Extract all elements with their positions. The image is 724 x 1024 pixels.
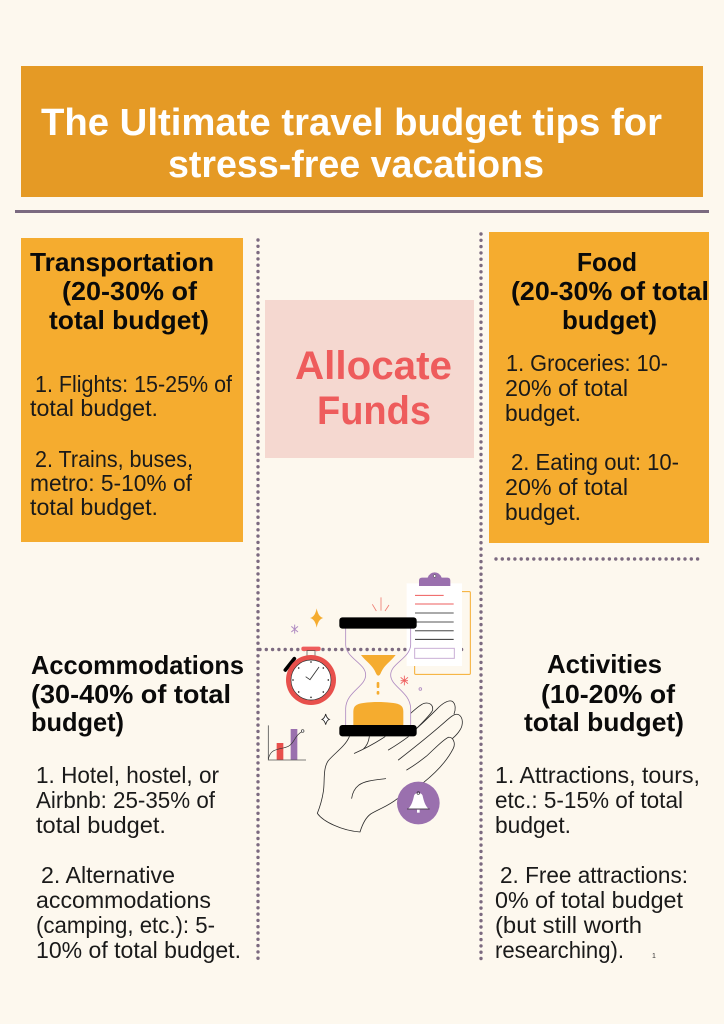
heading: transportation (30, 247, 214, 335)
text: transportation items: total budget. (30, 395, 158, 421)
panel: food (489, 232, 709, 543)
text: food items: budget. (505, 499, 581, 525)
heading: accommodations: (30-40% of total (31, 679, 231, 709)
text: accommodations items: accommodations (36, 887, 211, 913)
text: food items: 1. Groceries: 10- (506, 350, 668, 376)
text: activities items: 0% of total budget (495, 887, 684, 913)
page number: 1 (652, 953, 656, 960)
text: food items: budget. (505, 400, 581, 426)
text: activities items: etc.: 5-15% of total (495, 787, 683, 813)
heading: activities (524, 649, 684, 737)
text: activities items: 1. Attractions, tours, (495, 762, 700, 788)
heading: activities: (10-20% of (541, 679, 675, 709)
icon: stopwatch (285, 647, 336, 705)
text: transportation items (30, 371, 233, 520)
text: food items: 20% of total (505, 375, 628, 401)
title banner: stress-free vacations (168, 144, 544, 186)
heading: activities: total budget) (524, 707, 684, 737)
text: activities items: (but still worth (495, 912, 642, 938)
title banner: The Ultimate travel budget tips for (41, 102, 662, 144)
text: food items: 20% of total (505, 474, 628, 500)
heading: food: budget) (562, 305, 657, 335)
text: food items: 2. Eating out: 10- (511, 449, 679, 475)
heading: transportation: total budget) (49, 305, 209, 335)
icon: hourglass (339, 617, 417, 736)
heading: transportation: (20-30% of (62, 276, 197, 306)
text: transportation items: metro: 5-10% of (30, 470, 193, 496)
text: activities items: budget. (495, 812, 571, 838)
text: activities items: 2. Free attractions: (500, 862, 688, 888)
text: accommodations items: 2. Alternative (41, 862, 175, 888)
panel: activities (495, 649, 700, 963)
illustration: hourglass in hand (268, 572, 470, 832)
text: accommodations items: (camping, etc.): 5- (36, 912, 215, 938)
icon: sparkle marks (291, 597, 422, 725)
text: transportation items: 1. Flights: 15-25% of (35, 371, 233, 397)
heading: food: (20-30% of total (511, 276, 709, 306)
text: accommodations items: total budget. (36, 812, 166, 838)
text: accommodations items (36, 762, 241, 963)
text: activities items (495, 762, 700, 963)
panel: allocate funds (265, 300, 474, 458)
text: food items (505, 350, 679, 525)
heading: accommodations (31, 650, 244, 737)
heading: activities: Activities (547, 649, 662, 679)
icon: bell (397, 782, 440, 824)
heading: transportation: Transportation (30, 247, 214, 277)
panel: transportation (21, 238, 243, 542)
heading: accommodations: Accommodations (31, 650, 244, 680)
panel: allocate funds: Funds (317, 389, 431, 433)
heading: food (511, 247, 709, 335)
panel: allocate funds: Allocate (295, 344, 452, 388)
icon: bar chart (268, 725, 306, 760)
text: accommodations items: Airbnb: 25-35% of (36, 787, 216, 813)
text: accommodations items: 1. Hotel, hostel, or (36, 762, 219, 788)
heading: food: Food (577, 247, 637, 277)
text: transportation items: total budget. (30, 494, 158, 520)
icon: hand (317, 701, 462, 832)
title banner (21, 66, 703, 197)
text: accommodations items: 10% of total budget. (36, 937, 241, 963)
panel: accommodations (31, 650, 244, 963)
text: transportation items: 2. Trains, buses, (35, 446, 193, 472)
text: activities items: researching). (495, 937, 624, 963)
heading: accommodations: budget) (31, 707, 124, 737)
icon: clipboard (407, 572, 470, 674)
